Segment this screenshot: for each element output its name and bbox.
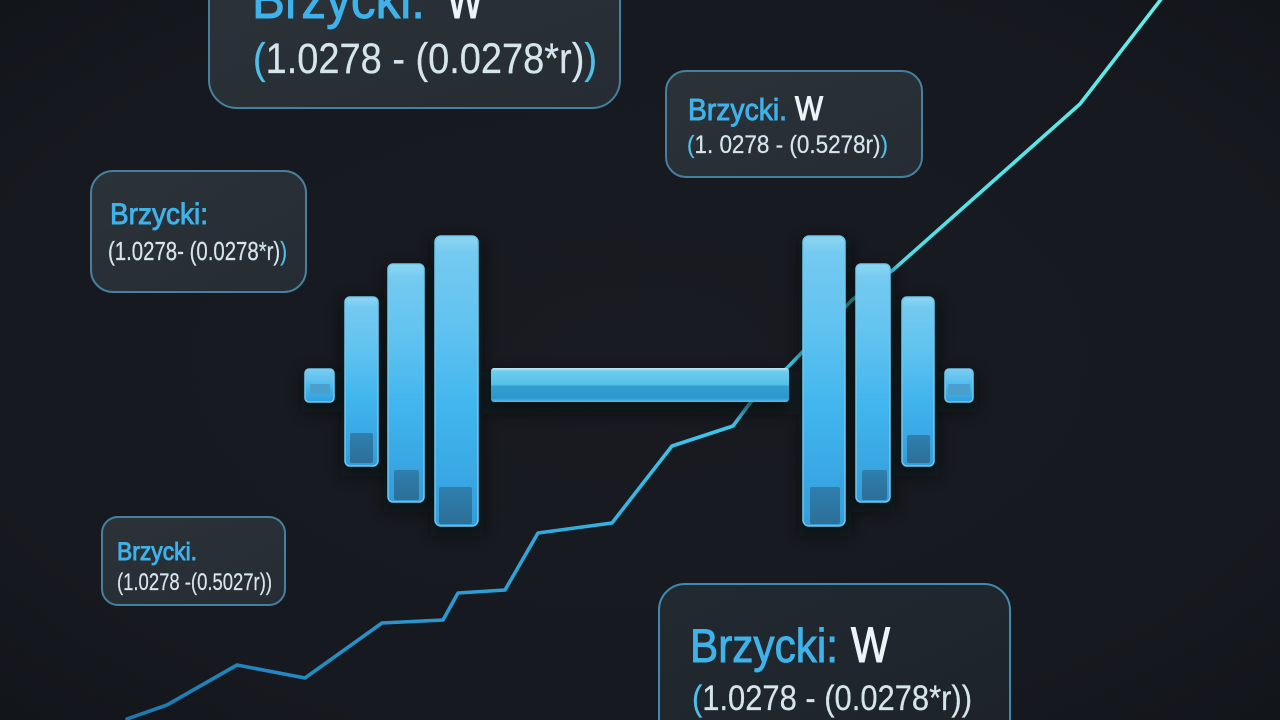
- left plate medium: [388, 264, 424, 502]
- right plate large: [803, 236, 845, 526]
- formula: upper right: (1. 0278 - (0.5278r)): [687, 131, 888, 159]
- left plate large: [435, 236, 478, 526]
- heading: left: Brzycki:: [110, 198, 208, 231]
- heading: lower left: Brzycki.: [117, 538, 197, 566]
- heading: bottom: Brzycki:: [690, 619, 838, 672]
- icon: barbell: [302, 236, 977, 536]
- formula: bottom: (1.0278 - (0.0278*r)): [692, 679, 972, 718]
- right plate medium: [856, 264, 890, 502]
- heading: upper right: Brzycki.: [688, 92, 787, 127]
- label: upper right W: W: [795, 90, 823, 128]
- formula: top: (1.0278 - (0.0278*r)): [253, 35, 597, 83]
- barbell shadows: [302, 240, 977, 536]
- barbell shaft: [491, 368, 789, 402]
- panel: upper right formula: [666, 71, 922, 177]
- formula: left: (1.0278- (0.0278*r)): [108, 236, 287, 266]
- panel: bottom formula: [659, 584, 1010, 720]
- panel: left formula: [91, 171, 306, 292]
- left plate small: [345, 297, 378, 466]
- panel: lower left formula: [102, 517, 285, 605]
- formula: lower left: (1.0278 -(0.5027r)): [117, 569, 272, 596]
- right plate small: [902, 297, 934, 466]
- right collar: [945, 369, 973, 402]
- label: bottom W: W: [851, 617, 891, 673]
- left collar: [305, 369, 334, 402]
- panel: top formula: [209, 0, 620, 108]
